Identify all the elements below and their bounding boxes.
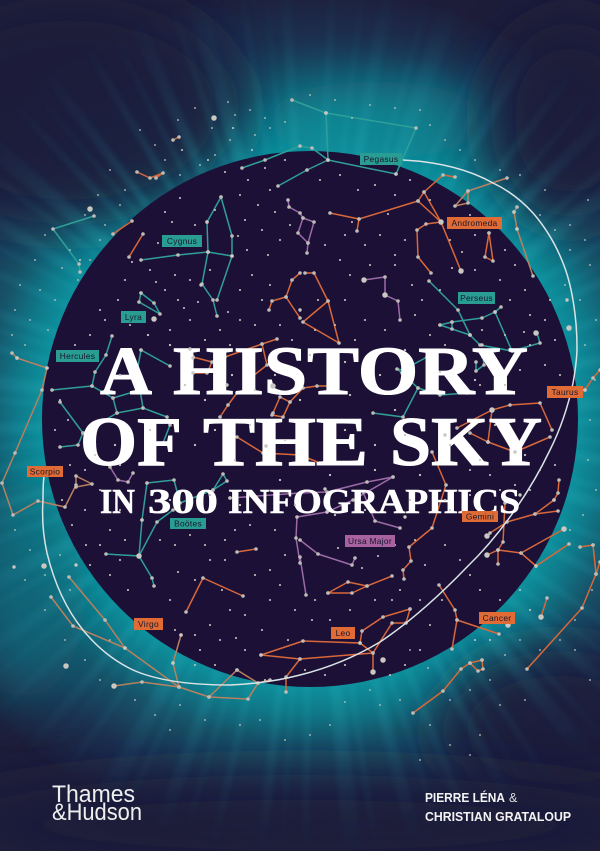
authors: PIERRE LÉNA xyxy=(425,790,505,805)
constellation: Cygnus xyxy=(141,197,232,316)
label: Taurus: Taurus xyxy=(552,387,578,397)
label: Perseus: Perseus xyxy=(460,293,493,303)
constellation: Boötes xyxy=(106,474,227,586)
subtitle: in 300 infographics xyxy=(100,482,520,521)
label: Taurus xyxy=(547,386,583,398)
constellation: top left outer xyxy=(53,216,94,272)
constellation: Pegasus xyxy=(242,100,416,186)
title: A History of the Sky: A xyxy=(100,333,152,409)
dark disc xyxy=(42,151,578,687)
constellation: Lyra xyxy=(139,293,160,314)
subtitle: in 300 infographics: IN xyxy=(100,482,135,521)
subtitle: in 300 infographics: INFOGRAPHICS xyxy=(228,482,520,521)
label: Andromeda xyxy=(447,217,502,229)
label: Hercules: Hercules xyxy=(60,351,95,361)
constellation: Hercules xyxy=(52,336,170,447)
constellation: Perseus xyxy=(373,281,540,417)
constellation: upper right xyxy=(455,178,533,276)
constellation: Scorpio xyxy=(2,353,92,515)
label: Cygnus xyxy=(162,235,202,247)
label: Leo: Leo xyxy=(336,628,350,638)
label: Ursa Major: Ursa Major xyxy=(348,536,392,546)
constellation: central orange figures xyxy=(113,137,339,463)
label: Lyra: Lyra xyxy=(125,312,142,322)
authors: & xyxy=(509,791,518,805)
white orbit ring xyxy=(43,160,577,685)
constellation: Cancer xyxy=(413,545,600,713)
publisher logo: Thames & Hudson: &Hudson xyxy=(52,799,142,826)
constellation: Virgo xyxy=(51,577,270,699)
publisher logo: Thames & Hudson xyxy=(52,781,142,826)
label: Andromeda: Andromeda xyxy=(452,218,498,228)
label: Scorpio: Scorpio xyxy=(30,466,60,476)
title: A History of the Sky xyxy=(80,333,542,481)
title: A History of the Sky: SKY xyxy=(390,404,542,481)
constellation: Taurus xyxy=(457,370,600,452)
constellation: Leo xyxy=(261,576,410,692)
label: Virgo xyxy=(134,618,163,630)
constellation: Andromeda xyxy=(330,175,493,273)
subtitle: in 300 infographics: 300 xyxy=(148,482,218,521)
label: Leo xyxy=(331,627,355,639)
title: A History of the Sky: THE xyxy=(203,404,368,481)
title: A History of the Sky: OF xyxy=(80,404,182,481)
label: Boötes: Boötes xyxy=(174,518,202,528)
constellation: lower left orange xyxy=(186,549,256,612)
label: Gemini: Gemini xyxy=(466,512,494,522)
label: Cancer xyxy=(479,612,515,624)
authors: CHRISTIAN GRATALOUP xyxy=(425,810,571,824)
label: Pegasus: Pegasus xyxy=(364,154,398,164)
label: Lyra xyxy=(121,311,146,323)
labels xyxy=(27,153,583,639)
scattered stars xyxy=(12,95,596,760)
authors xyxy=(425,790,571,824)
constellation: small purple figures xyxy=(288,200,400,320)
constellation: Gemini xyxy=(403,452,569,579)
label: Hercules xyxy=(56,350,99,362)
title: A History of the Sky: HISTORY xyxy=(173,333,528,409)
label: Virgo: Virgo xyxy=(138,619,159,629)
label: Pegasus xyxy=(360,153,402,165)
publisher logo: Thames & Hudson: Thames xyxy=(52,781,135,808)
constellation: Ursa Major xyxy=(110,467,400,595)
label: Cygnus: Cygnus xyxy=(167,236,197,246)
label: Cancer: Cancer xyxy=(483,613,511,623)
